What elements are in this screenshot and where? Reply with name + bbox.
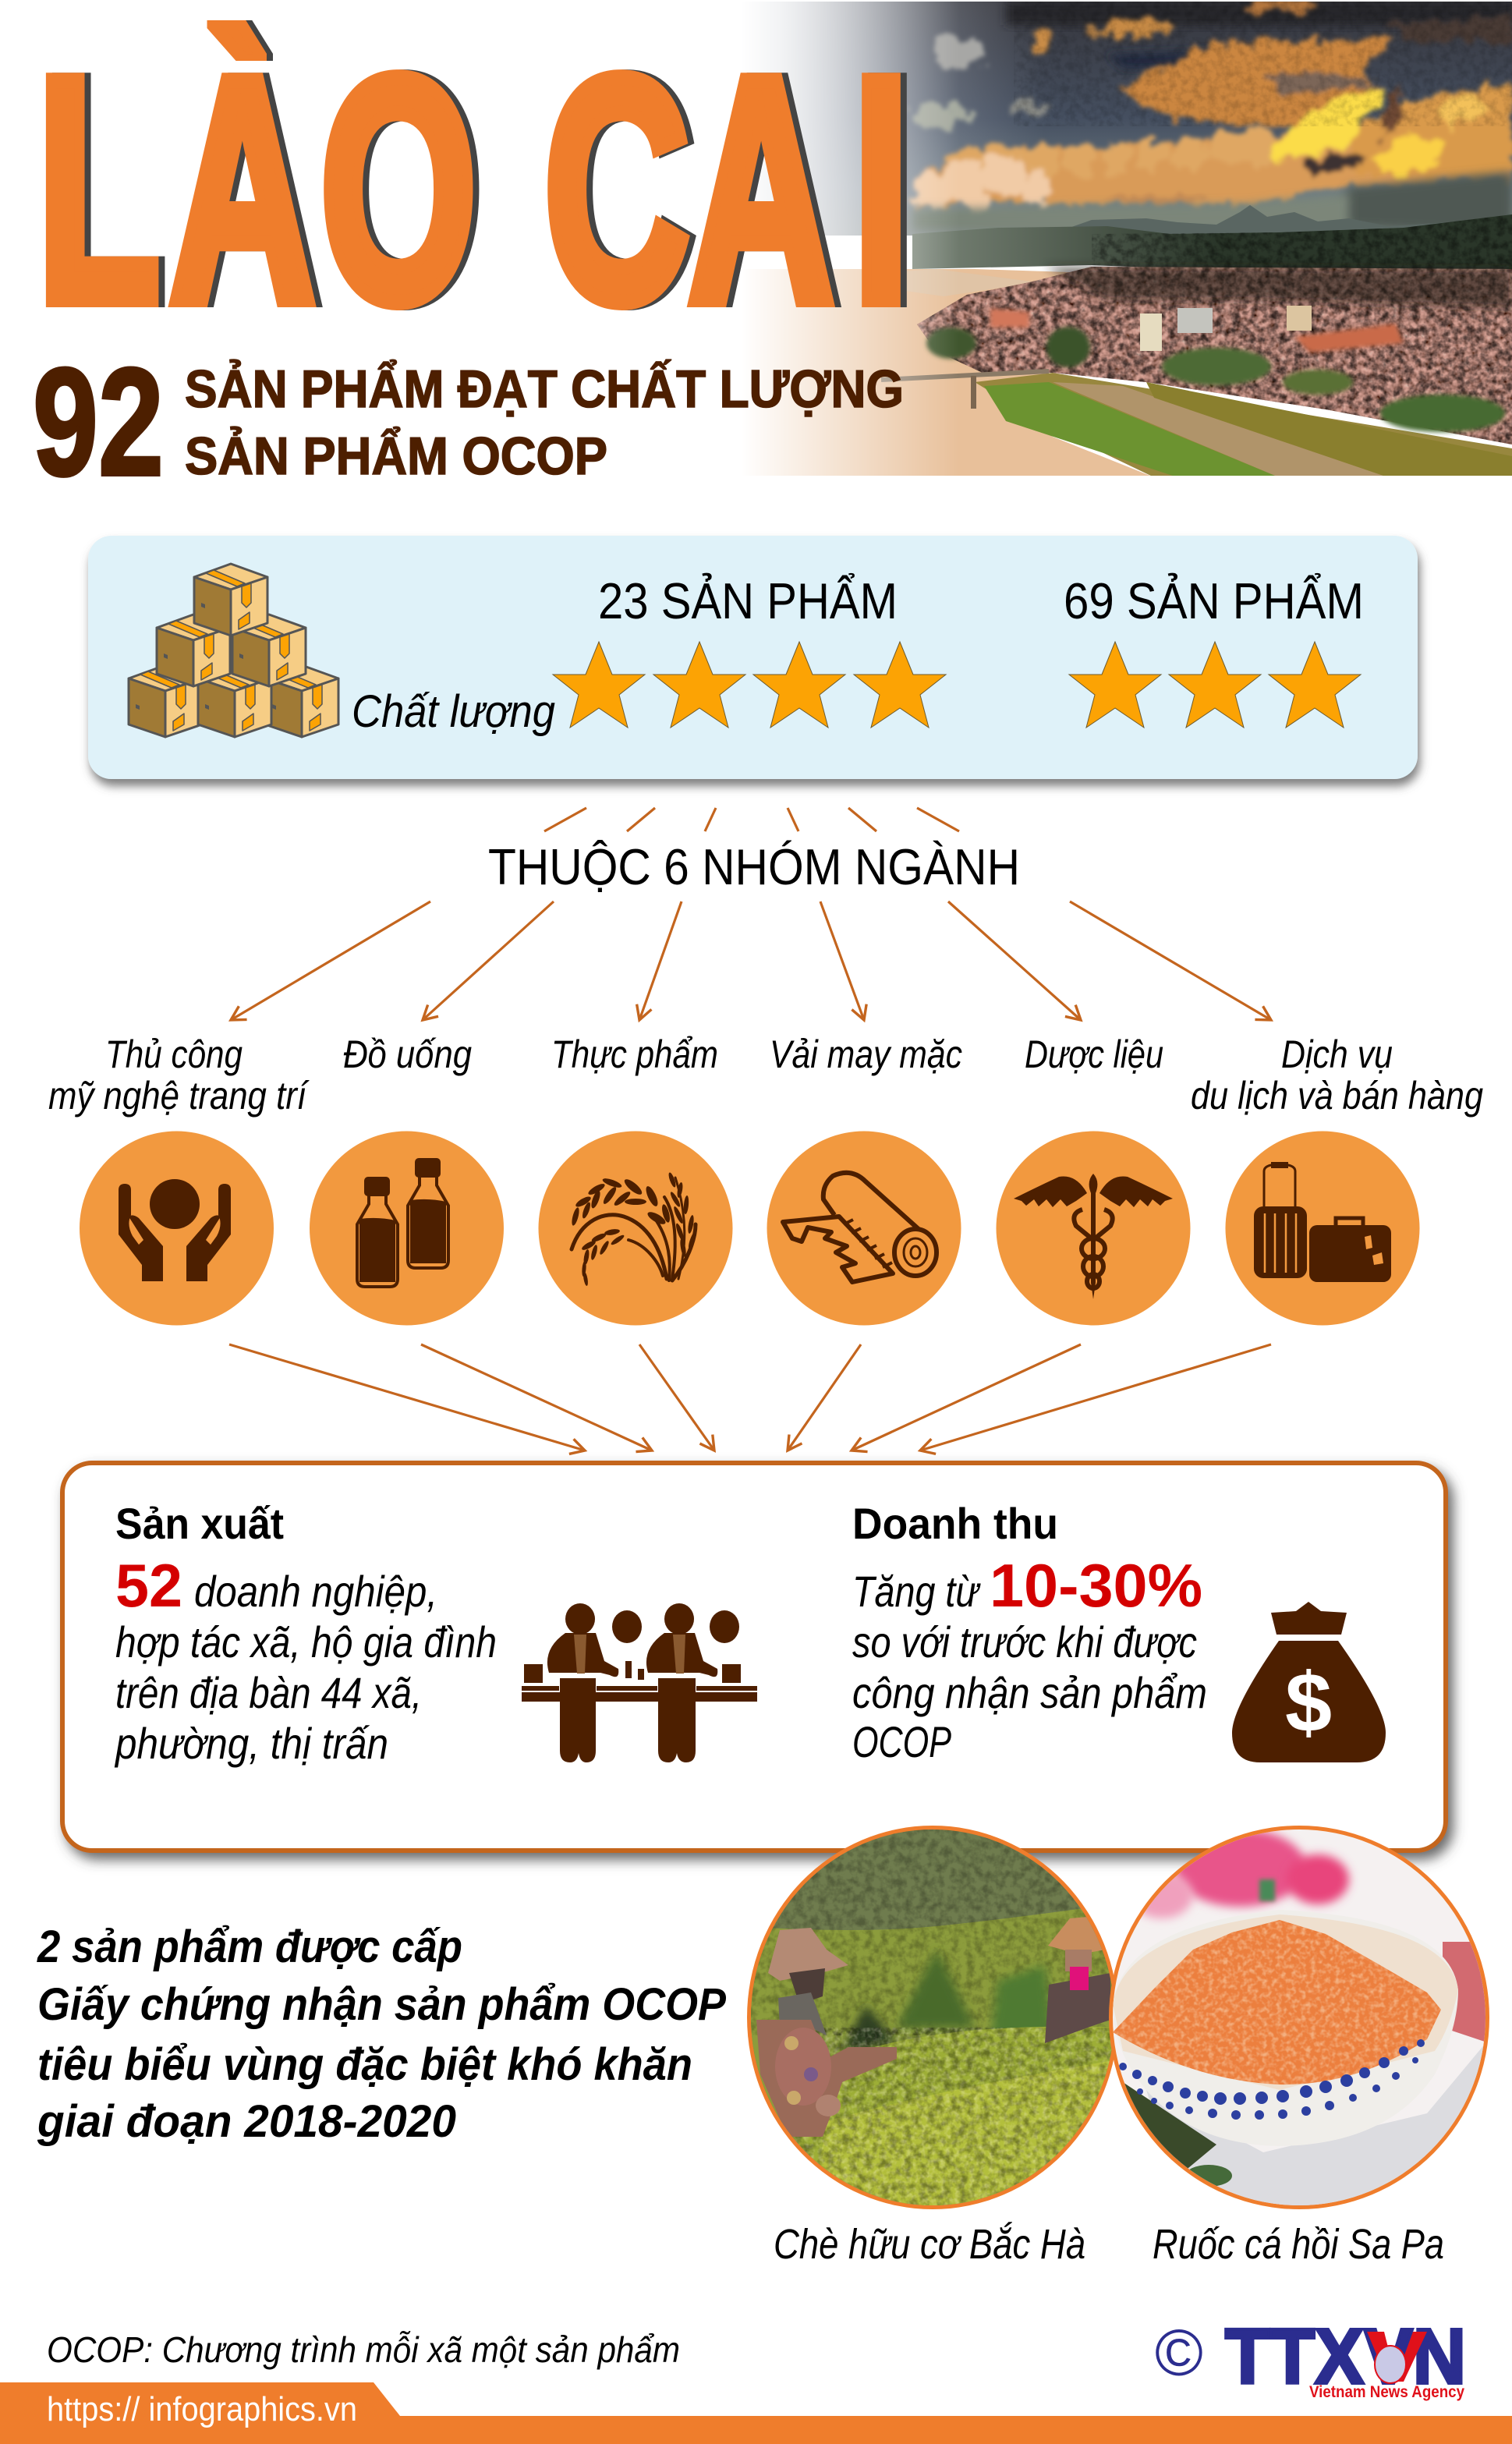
certification text [37,1922,726,2147]
certification text: tiêu biểu vùng đặc biệt khó khăn [37,2039,692,2090]
sector labels: Thủ công [105,1033,243,1076]
bridge [881,371,1049,380]
heading: six sectors: THUỘC 6 NHÓM NGÀNH [488,838,1020,895]
logo: TTXVN: © [1155,2316,1203,2389]
panel: production and revenue [62,1463,1446,1851]
four stars [553,642,946,728]
photo: Bắc Hà organic tea [741,1825,1123,2215]
river [760,269,1150,476]
icon: beverage bottles [310,1131,504,1326]
label: 23 sản phẩm: 23 SẢN PHẨM [598,572,898,629]
revenue text: OCOP [852,1717,951,1766]
sector labels: mỹ nghệ trang trí [48,1074,310,1118]
captions for photos: Chè hữu cơ Bắc Hà [774,2221,1085,2268]
central orange cloud [1121,39,1391,129]
footer band [0,2382,1512,2444]
sector labels: Dược liệu [1025,1033,1163,1076]
panel: quality stars [88,536,1418,779]
big number 92: 92 [33,336,164,508]
lower cloud band [915,122,1512,211]
arrows from heading to sectors [231,901,1271,1020]
icon: handicraft hands [80,1131,274,1326]
certification text: Giấy chứng nhận sản phẩm OCOP [37,1979,726,2030]
sector labels: Thực phẩm [551,1033,718,1076]
green river bank [975,373,1512,477]
revenue text: 10-30% [990,1551,1202,1620]
subtitle: SẢN PHẨM ĐẠT CHẤT LƯỢNG [185,359,904,419]
icon: fabric roll [767,1131,961,1326]
production text: 52 [115,1551,182,1620]
icon: luggage travel [1226,1131,1419,1326]
icon: rice food [538,1131,733,1326]
title: LÀO CAI: LÀO CAI [37,12,909,367]
logo: TTXVN: Vietnam News Agency [1309,2383,1464,2401]
production text: trên địa bàn 44 xã, [115,1668,422,1717]
upper cloud streaks [1085,20,1179,36]
captions for photos [774,2221,1444,2268]
footnote: OCOP: Chương trình mỗi xã một sản phẩm [47,2329,680,2370]
production text: phường, thị trấn [114,1719,388,1768]
heading: revenue: Doanh thu [852,1499,1058,1548]
certification text: giai đoạn 2018-2020 [37,2096,456,2147]
production text [114,1551,497,1768]
sector labels: Đồ uống [343,1033,472,1076]
city [917,267,1512,445]
revenue text: công nhận sản phẩm [852,1668,1207,1717]
icon: money bag: $ [1285,1655,1332,1749]
header photo: Lào Cai city view [702,0,1512,483]
arrows from sectors to results [229,1344,1271,1450]
right bright clouds [1347,82,1512,181]
label: Chất lượng: Chất lượng [352,686,555,737]
sector labels [48,1033,1483,1118]
revenue text [852,1551,1207,1766]
farmer right [1048,1917,1103,1953]
floss [1113,1920,1441,2084]
revenue text: Tăng từ [852,1567,981,1616]
farmer left [768,1928,848,1981]
three stars [1069,642,1361,728]
revenue text: so với trước khi được [852,1617,1197,1667]
sector labels: Vải may mặc [770,1033,962,1076]
title: LÀO CAI: LÀO CAI [44,12,915,367]
captions for photos: Ruốc cá hồi Sa Pa [1153,2221,1444,2268]
heading: production: Sản xuất [115,1499,284,1548]
connector lines from panel to heading [544,808,959,831]
icon: stacked boxes [129,564,338,737]
production text: hợp tác xã, hộ gia đình [115,1617,497,1667]
sector labels: Dịch vụ [1281,1033,1393,1076]
icon: money bag [1232,1602,1386,1762]
certification text: 2 sản phẩm được cấp [37,1922,462,1972]
bowl [1113,1957,1458,2146]
production text: doanh nghiệp, [194,1567,437,1616]
horizon and mountains [1342,165,1512,226]
subtitle: SẢN PHẨM OCOP [185,426,607,486]
logo: TTXVN: TTXVN [1225,2313,1466,2400]
subtitle [185,359,904,486]
footer url: https:// infographics.vn [47,2390,357,2428]
label: 69 sản phẩm: 69 SẢN PHẨM [1064,572,1364,629]
icon: caduceus medicine [997,1131,1190,1326]
photo: Sa Pa salmon floss [1107,1825,1489,2215]
icon: workers at table [522,1603,757,1762]
